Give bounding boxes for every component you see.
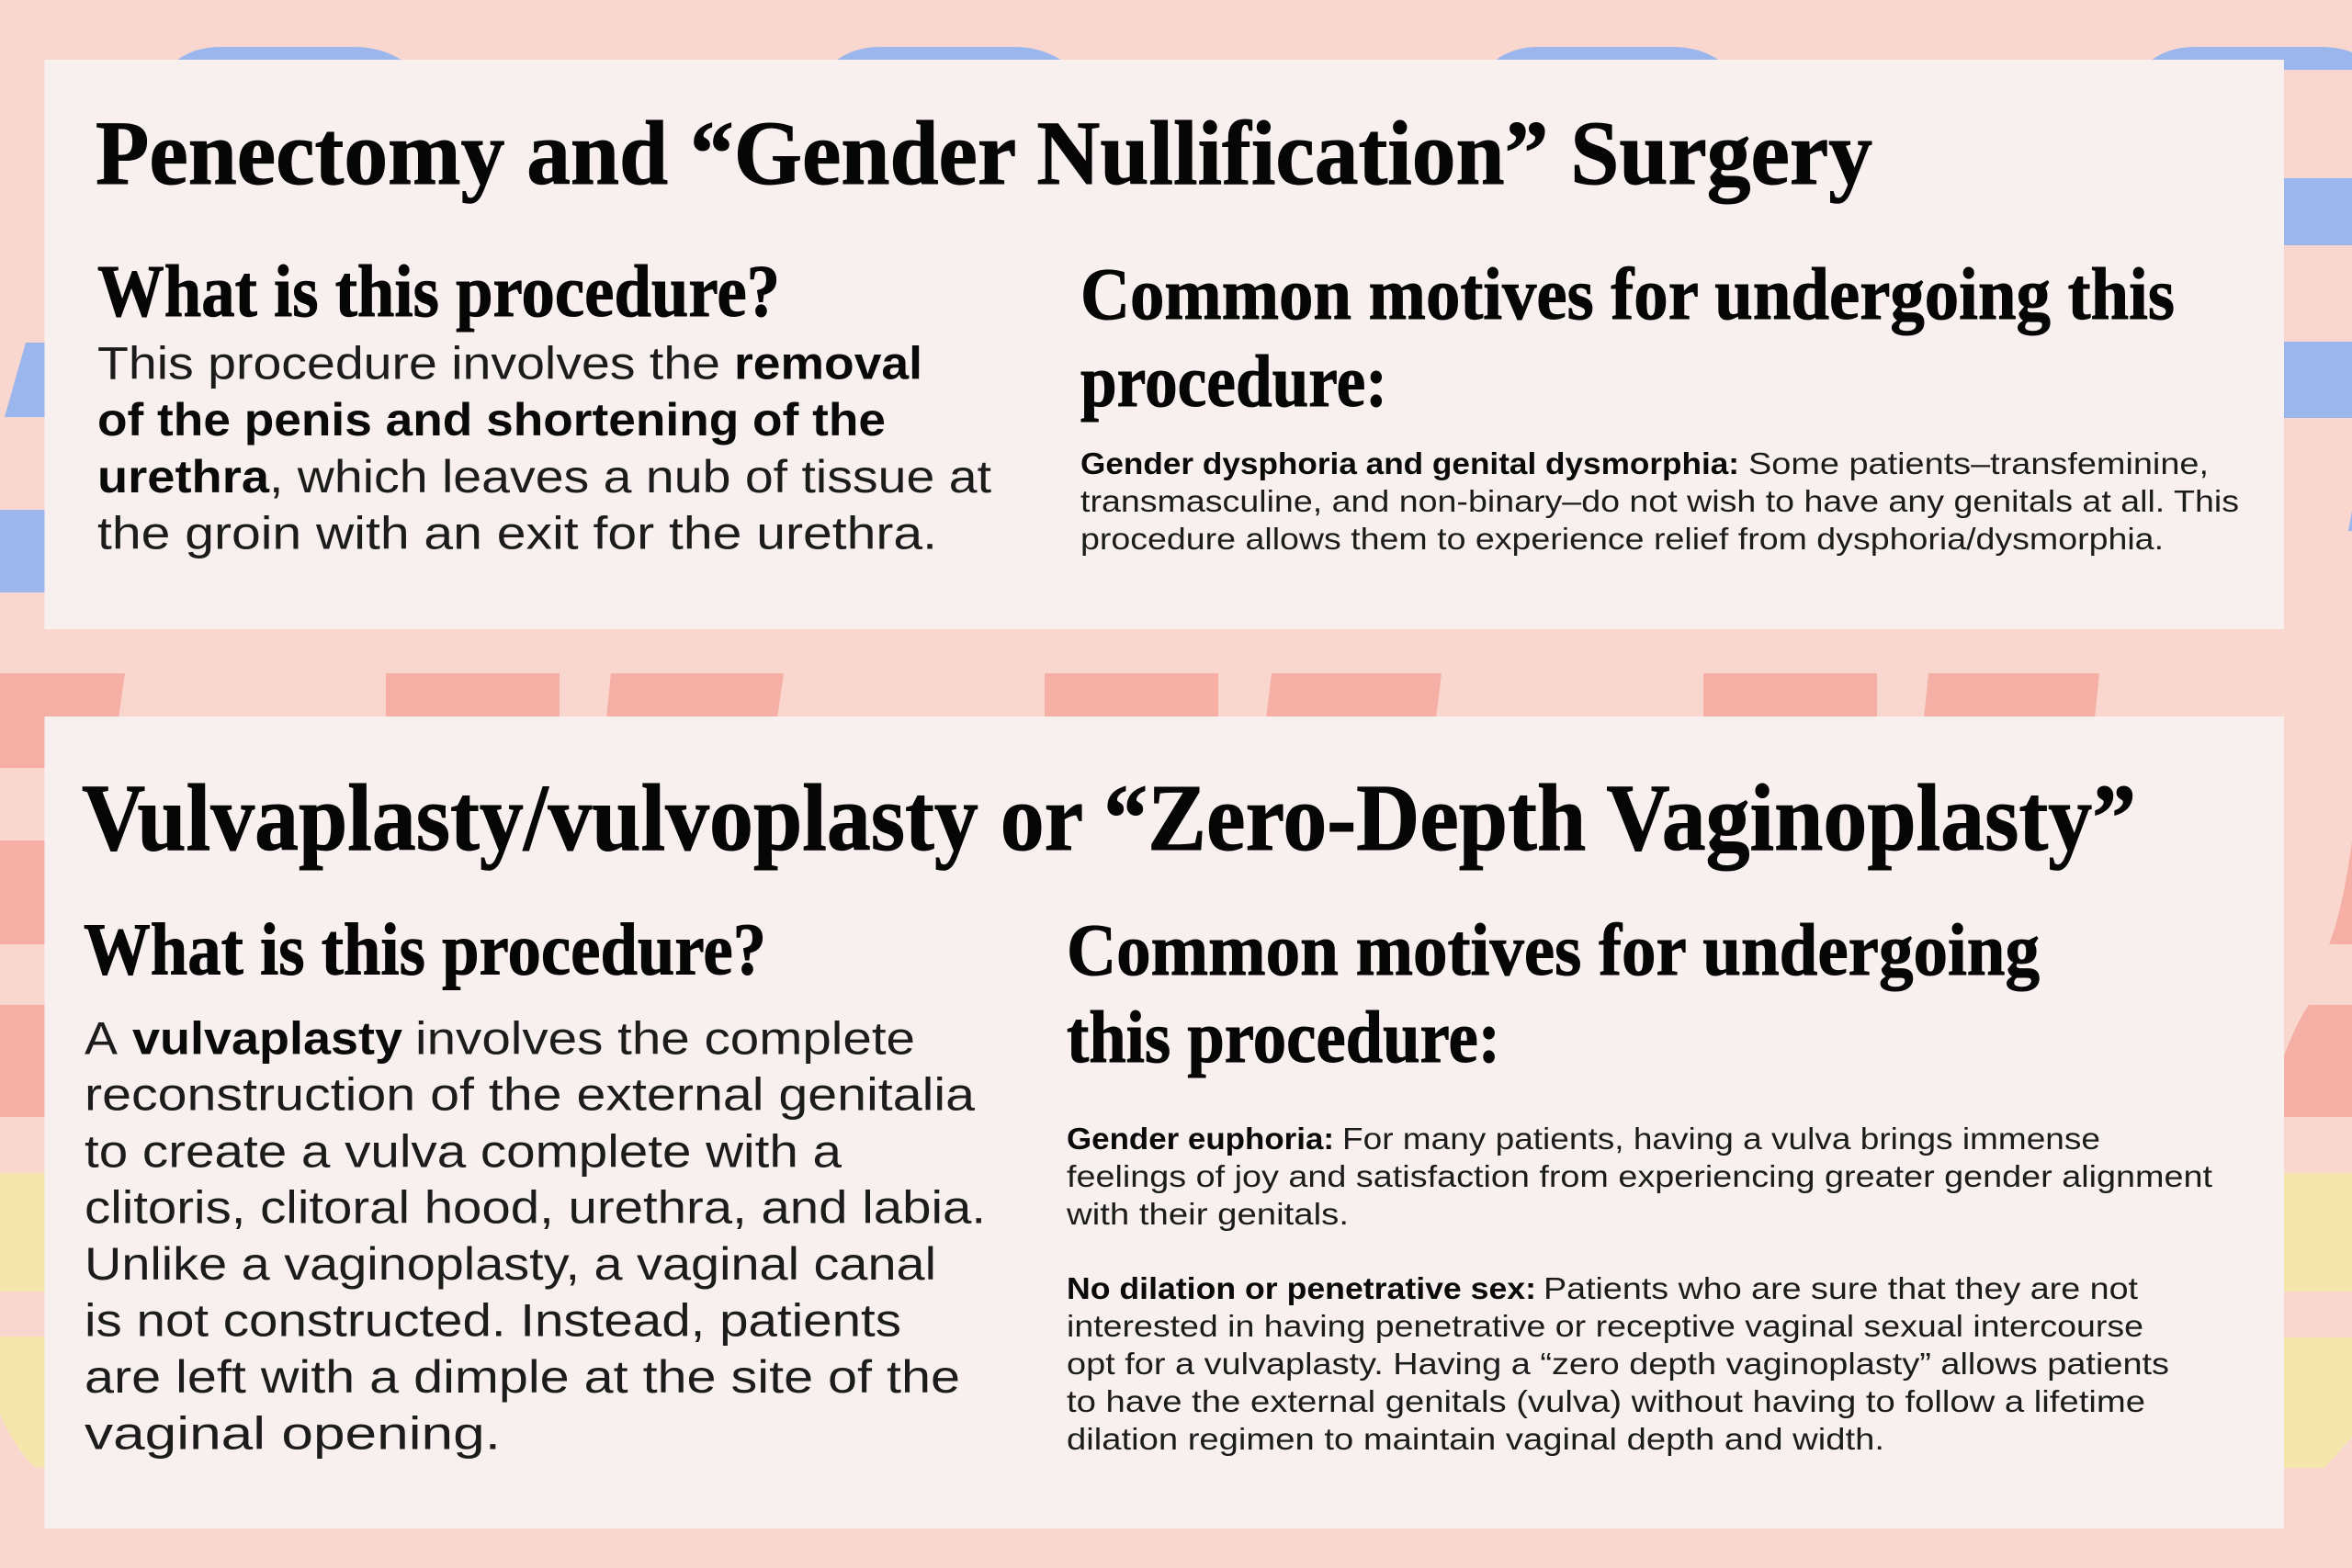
text block: procedure description: vulvaplasty [132, 1012, 402, 1064]
text block: procedure description: reconstruction of the external genitalia [85, 1069, 975, 1121]
text block: procedure description: involves the complete [415, 1012, 915, 1064]
title: vulvaplasty: Vulvaplasty/vulvoplasty or “Zero-Depth Vaginoplasty” [82, 765, 2136, 871]
text block: procedure description: , which leaves a nub of tissue at [269, 451, 991, 502]
text block: procedure description: Unlike a vaginoplasty, a vaginal canal [85, 1238, 936, 1290]
heading: common motives: Common motives for undergoing [1067, 910, 2040, 991]
heading: common motives [1067, 910, 2040, 1078]
text block: no dilation motive: No dilation or penetrative sex: [1067, 1271, 1536, 1305]
text block: gender euphoria motive [1066, 1122, 2212, 1231]
heading: common motives: procedure: [1080, 342, 1387, 423]
text block: procedure description: urethra [97, 451, 270, 502]
text block: procedure description: A [85, 1012, 119, 1064]
text block: gender dysphoria motive: transmasculine, and non-binary–do not wish to have any genitals at all. This [1080, 484, 2239, 518]
text block: gender euphoria motive: For many patients, having a vulva brings immense [1342, 1122, 2100, 1156]
text block: procedure description: clitoris, clitoral hood, urethra, and labia. [85, 1181, 986, 1233]
panel: vulvaplasty [44, 716, 2284, 1529]
heading: common motives: Common motives for undergoing this [1080, 254, 2175, 335]
text block: procedure description: This procedure involves the [97, 338, 720, 389]
text block: gender dysphoria motive: Some patients–transfeminine, [1748, 446, 2209, 480]
text block: no dilation motive: interested in having penetrative or receptive vaginal sexual intercourse [1067, 1309, 2143, 1343]
heading: what is this procedure: What is this procedure? [97, 252, 780, 333]
text block: gender euphoria motive: Gender euphoria: [1067, 1122, 1334, 1156]
text block: no dilation motive: dilation regimen to maintain vaginal depth and width. [1067, 1422, 1884, 1456]
text block: no dilation motive: Patients who are sure that they are not [1544, 1271, 2138, 1305]
text block: procedure description: removal [734, 338, 922, 389]
text block: procedure description: are left with a dimple at the site of the [85, 1351, 960, 1403]
text block: gender euphoria motive: with their genitals. [1066, 1197, 1349, 1231]
text block: gender dysphoria motive [1080, 446, 2239, 556]
text block: gender dysphoria motive: Gender dysphoria and genital dysmorphia: [1080, 446, 1739, 480]
text block: gender dysphoria motive: procedure allows them to experience relief from dysphoria/dysmorphia. [1080, 522, 2164, 556]
heading: common motives: this procedure: [1067, 998, 1500, 1078]
heading: what is this procedure: What is this procedure? [84, 909, 766, 990]
heading: common motives [1080, 254, 2175, 423]
text block: procedure description [97, 338, 991, 558]
text block: gender euphoria motive: feelings of joy and satisfaction from experiencing greater gender alignment [1067, 1159, 2212, 1193]
text block: procedure description: of the penis and shortening of the [97, 394, 886, 446]
text block: procedure description [85, 1012, 986, 1459]
text block: procedure description: is not constructed. Instead, patients [85, 1295, 901, 1347]
text block: procedure description: to create a vulva complete with a [85, 1126, 842, 1178]
text block: procedure description: the groin with an exit for the urethra. [97, 507, 937, 558]
text block: no dilation motive [1067, 1271, 2169, 1456]
title: penectomy: Penectomy and “Gender Nullification” Surgery [96, 102, 1872, 204]
text block: no dilation motive: opt for a vulvaplasty. Having a “zero depth vaginoplasty” allows patients [1067, 1347, 2169, 1381]
panel: penectomy [44, 60, 2284, 629]
text block: no dilation motive: to have the external genitals (vulva) without having to follow a lifetime [1067, 1384, 2145, 1418]
text block: procedure description: vaginal opening. [85, 1407, 501, 1459]
